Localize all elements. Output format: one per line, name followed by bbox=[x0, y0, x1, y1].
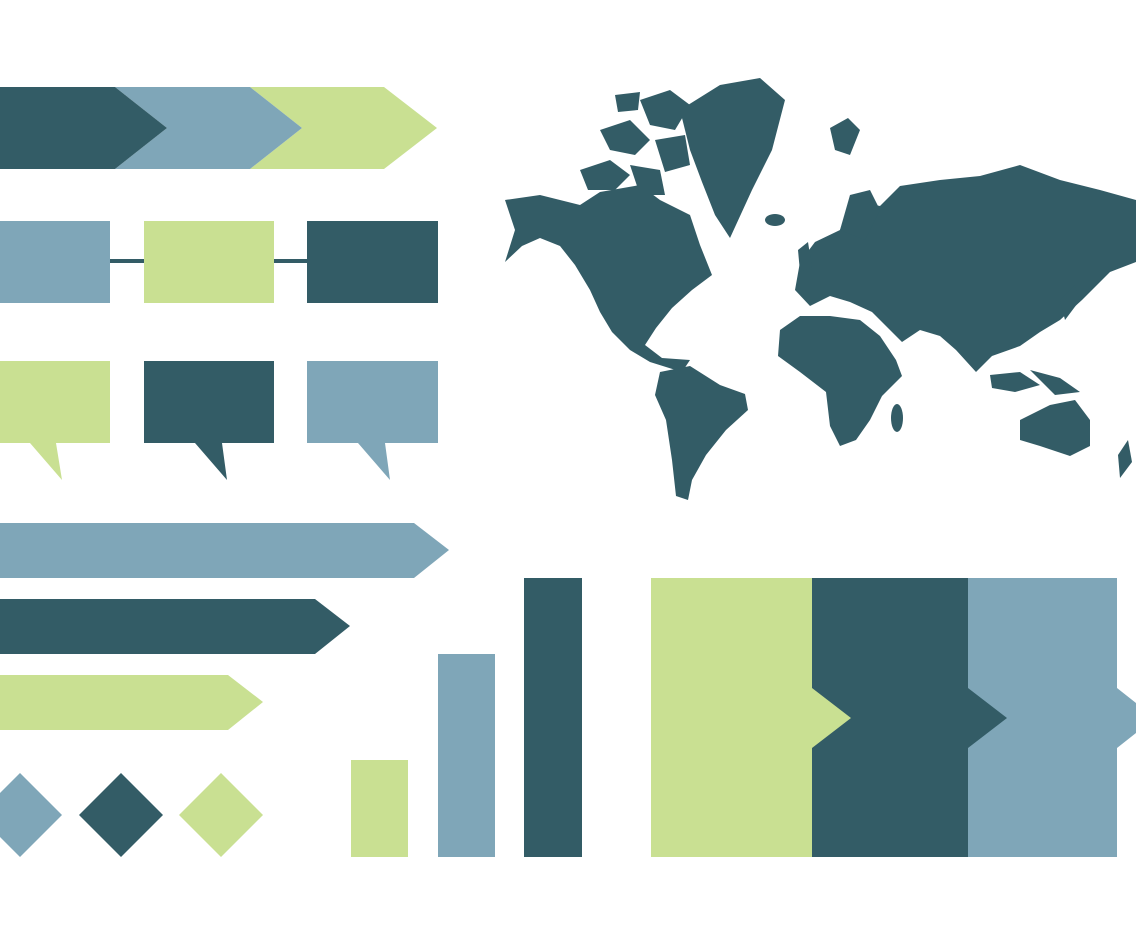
madagascar bbox=[891, 404, 903, 432]
connected boxes row bbox=[0, 221, 438, 303]
arrow bars bbox=[0, 523, 449, 730]
world map bbox=[505, 78, 1136, 500]
uk bbox=[798, 242, 812, 272]
svalbard bbox=[830, 118, 860, 155]
bar chart bbox=[351, 578, 582, 857]
arctic islands bbox=[580, 160, 630, 190]
north america bbox=[505, 185, 712, 372]
japan bbox=[1060, 285, 1080, 320]
australia bbox=[1020, 400, 1090, 456]
chevron process row bbox=[0, 87, 437, 169]
eurasia bbox=[795, 165, 1136, 372]
new zealand bbox=[1118, 440, 1132, 478]
south america bbox=[655, 366, 748, 500]
iceland bbox=[765, 214, 785, 226]
scandinavia bbox=[840, 190, 880, 240]
greenland bbox=[680, 78, 785, 238]
southeast asia islands bbox=[990, 372, 1040, 392]
diamonds bbox=[0, 773, 263, 857]
big step blocks bbox=[651, 578, 1136, 857]
africa bbox=[778, 316, 902, 446]
speech bubbles row bbox=[0, 361, 438, 480]
